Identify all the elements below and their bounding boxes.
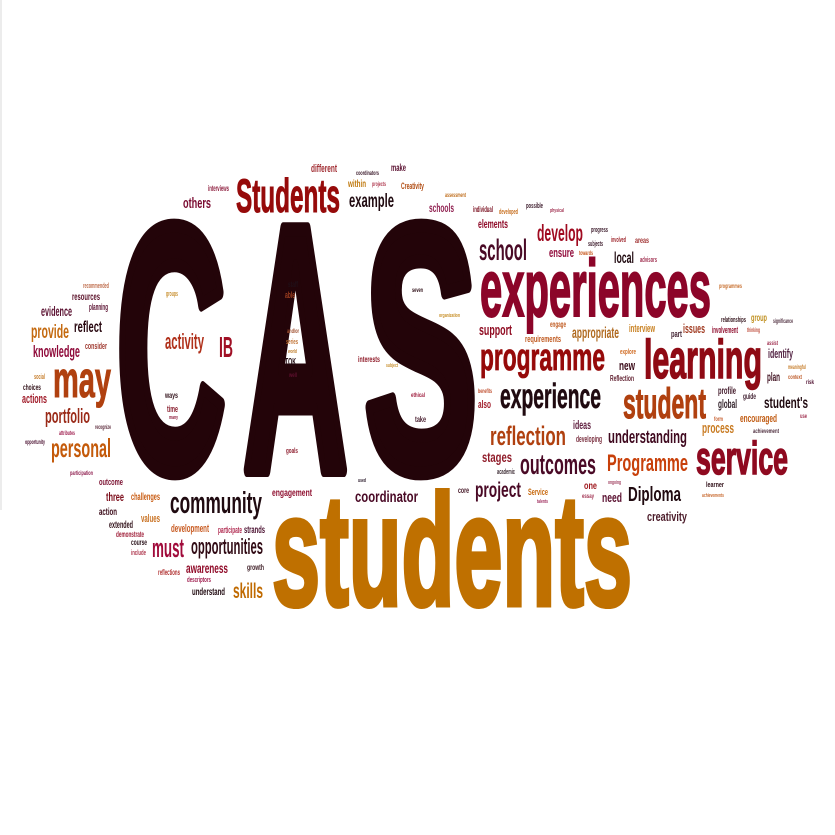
words: upper centre: elements [478,217,508,231]
words: right side: relationships [721,317,746,324]
words: centre and lower right: academic [497,469,515,476]
words: upper centre: Creativity [401,181,424,191]
words: right side: programmes [719,284,742,290]
words: centre and lower right: subject [386,363,398,369]
words: centre and lower right: stages [482,449,512,465]
word: CAS: A [243,154,348,545]
words: centre and lower right: interests [358,355,380,364]
words: upper centre: staff [288,280,298,289]
words: lower left: growth [247,563,264,572]
words: upper centre: coordinators [356,171,379,177]
words: upper left: interviews [208,184,229,193]
words: right side: group [751,313,767,324]
word: Students: Students [236,169,340,222]
words: upper left: recommended [83,283,109,290]
words: lower left: participation [70,471,93,477]
words: upper left: social [34,374,45,381]
words: right side: achievement [753,429,779,435]
words: lower left: three [106,490,124,504]
words: right side: plan [767,370,780,384]
words: right side: local [614,250,634,267]
words: lower left: development [171,523,209,535]
words: lower left: many [169,415,178,421]
word cloud: IB [219,332,233,364]
words: lower left: participate [218,525,242,535]
words: centre and lower right: benefits [478,389,492,395]
words: centre and lower right: ideas [573,418,591,432]
word: community: community [170,485,262,520]
words: lower left: include [131,550,146,557]
words: upper centre: physical [550,208,564,214]
words: lower left: recognize [95,425,111,431]
words: upper left: reflect [74,319,102,336]
words: lower left: reflections [158,568,180,577]
words: right side: global [718,397,737,411]
word: experience: experience [500,377,601,416]
words: right side: new [619,358,636,373]
words: right side: learner [706,482,724,489]
word: develop: develop [537,220,583,246]
words: centre and lower right: used [358,478,366,484]
words: right side: encouraged [740,413,777,425]
words: upper left: others [183,195,211,212]
words: right side: meaningful [788,365,806,371]
words: right side: thinking [747,328,760,334]
words: centre and lower right: engagement [272,488,312,499]
word cloud: must [152,533,184,563]
words: right side: areas [635,236,649,245]
words: right side: achievements [702,493,724,499]
words: centre and lower right: goals [286,448,298,455]
words: centre and lower right: developing [576,434,602,444]
words: lower left: skills [233,580,263,603]
words: right side: guide [743,392,756,401]
words: upper left: planning [89,302,108,312]
word: outcomes: outcomes [520,449,596,481]
words: lower left: descriptors [187,577,211,584]
words: lower left: demonstrate [116,530,144,539]
words: upper centre: example [349,191,394,212]
word: Diploma: Diploma [628,484,682,506]
words: upper left: resources [72,292,100,303]
words: upper left [31,184,233,381]
words: right side: progress [591,227,608,234]
words: lower left: portfolio [45,406,90,428]
words: upper centre: series [286,339,298,346]
words: right side: Reflection [610,374,634,383]
words: lower left: outcome [99,477,123,487]
words: lower left: understand [192,587,225,598]
word: project: project [475,479,521,502]
words: upper centre: able [285,290,295,300]
words: upper centre: different [311,163,337,175]
words: upper left: groups [166,291,178,298]
words: right side: context [788,375,802,381]
words: upper left: provide [31,322,69,343]
words: right side: significance [773,319,793,325]
words: right side: involved [611,237,626,244]
words: lower left: choices [23,383,41,392]
words: right side: subjects [588,241,603,248]
words: centre and lower right: ongoing [608,480,621,486]
word: may: may [53,351,111,408]
words: upper centre: requirements [525,334,561,344]
words: lower left: attributes [59,431,75,437]
words: lower left: challenges [131,492,160,503]
words: right side: identify [768,346,793,361]
words: lower left: strands [244,525,265,536]
words: right side: process [702,420,734,437]
words: upper centre: possible [526,203,543,210]
words: upper left: activity [165,329,204,354]
words: right side: towards [579,251,593,257]
words: upper centre: engage [550,320,566,329]
words: right side: creativity [647,509,688,524]
words: upper centre: seven [412,288,423,294]
words: lower left: opportunity [25,440,45,446]
words: upper centre: make [391,163,406,174]
word: opportunities: opportunities [191,534,263,559]
words: lower left: awareness [186,560,228,576]
words: upper centre: within [347,179,366,190]
words: centre and lower right: essay [582,494,594,500]
words: right side: part [671,329,682,339]
words: upper centre: assessment [445,193,466,199]
words: upper left: knowledge [33,342,80,361]
words: upper centre: world [287,349,297,355]
words: lower left: actions [22,391,47,406]
word: programme: programme [480,337,605,379]
words: upper centre: schools [429,201,454,215]
words: lower left: extended [109,520,133,531]
words: centre and lower right: ethical [411,393,425,399]
words: upper centre: organization [439,313,460,319]
words: upper centre: individual [473,205,493,214]
words: upper left: consider [85,341,107,351]
words: upper centre: and/or [287,329,299,335]
words: lower left: time [167,404,178,414]
words: lower left: action [99,507,117,518]
words: centre and lower right: coordinator [355,489,418,506]
word: student: student [623,380,706,428]
words: upper left: evidence [41,303,72,319]
words: lower left: course [131,538,147,547]
words: right side: advisors [640,257,657,264]
word: understanding: understanding [608,427,687,447]
words: right side: use [800,414,807,420]
words: right side: explore [620,349,636,356]
words: centre and lower right: one [584,481,597,492]
words: right side [572,227,814,524]
words: centre and lower right: take [415,415,426,424]
word cloud: school [479,234,527,267]
words: centre and lower right: need [602,490,622,505]
words: right side: profile [718,386,736,397]
words: upper centre [285,163,574,379]
words: centre and lower right: core [458,486,469,495]
words: upper centre: TOK [285,357,296,368]
word: personal: personal [51,433,111,463]
word: CAS: C [116,154,226,545]
word cloud: S [364,154,478,545]
words: right side: student's [764,395,808,412]
words: centre and lower right [272,355,622,506]
word: reflection: reflection [490,421,566,451]
words: right side: risk [806,380,814,386]
words: upper centre: developed [499,209,518,216]
words: lower left [22,383,265,603]
words: upper centre: projects [372,182,386,188]
words: upper centre: well [288,373,297,379]
word: CAS [116,154,478,545]
words: upper centre: support [479,322,512,339]
word: Programme: Programme [607,450,688,477]
words: right side: involvement [712,325,738,335]
words: right side: interview [629,323,655,335]
words: centre and lower right: Service [528,487,548,497]
words: centre and lower right: also [478,399,491,411]
words: right side: form [714,417,723,423]
words: right side: issues [683,321,705,336]
words: upper centre: ensure [549,245,574,260]
words: right side: assist [767,341,778,347]
words: lower left: values [141,513,160,525]
words: lower left: ways [164,391,178,400]
words: right side: appropriate [572,325,619,342]
words: centre and lower right: talents [537,499,548,505]
